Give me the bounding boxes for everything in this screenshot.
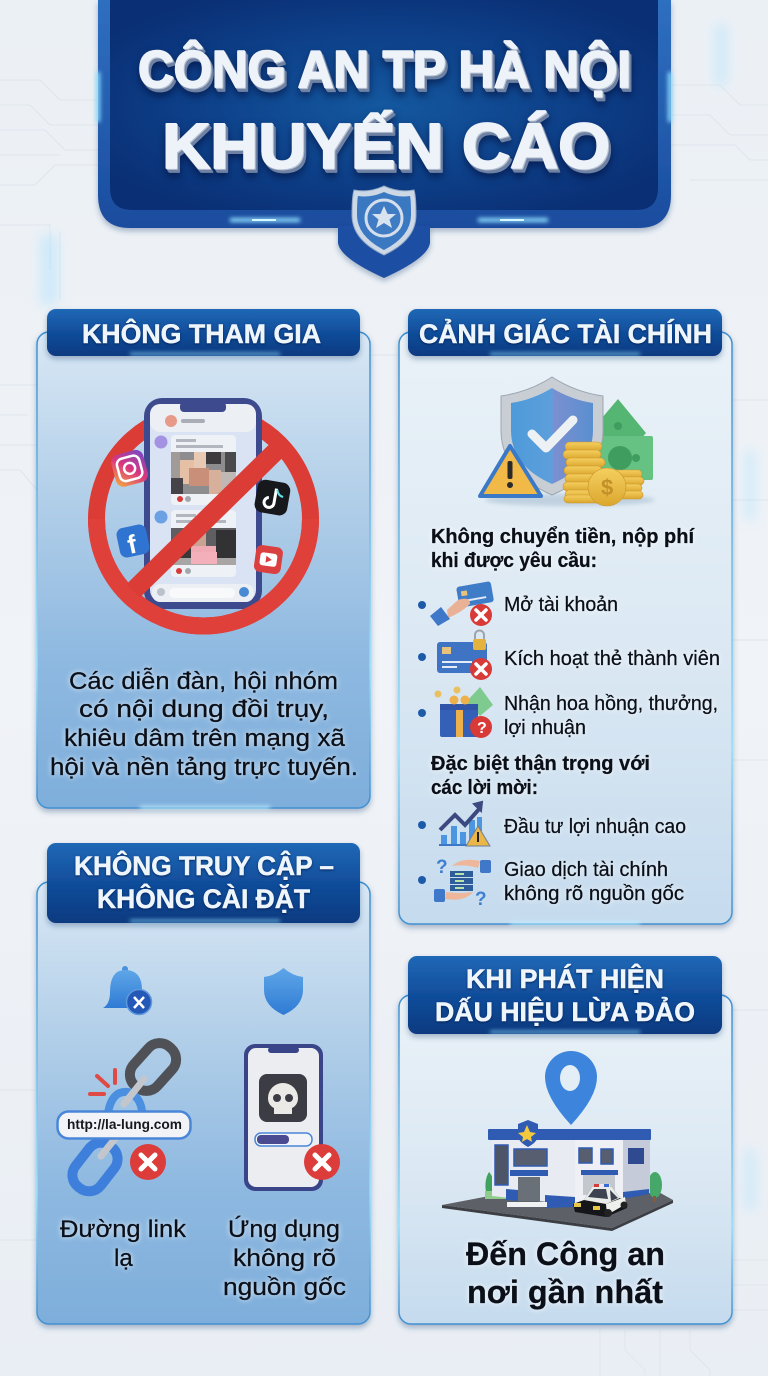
subheading 1: Không chuyển tiền, nộp phí [431, 526, 695, 548]
heading tab [408, 956, 722, 1034]
list item: giao dịch tài chính: ? [436, 857, 448, 878]
label: ứng dụng không rõ nguồn gốc: nguồn gốc [223, 1274, 346, 1301]
header banner [96, 0, 672, 278]
panel 1 text [50, 668, 358, 781]
panel: không tham gia [37, 309, 370, 809]
heading tab: CẢNH GIÁC TÀI CHÍNH [419, 317, 712, 349]
heading tab [47, 843, 360, 923]
list item: đầu tư lợi nhuận cao: Đầu tư lợi nhuận cao [504, 816, 686, 838]
url bar [58, 1112, 190, 1138]
title line 2: KHUYẾN CÁO [162, 110, 610, 182]
list item: kích hoạt thẻ thành viên [418, 630, 720, 680]
heading tab: KHÔNG CÀI ĐẶT [97, 883, 310, 914]
icon: broken link with url [58, 1037, 190, 1197]
blurred image 1 [171, 452, 236, 494]
text: đến công an nơi gần nhất: nơi gần nhất [467, 1274, 663, 1310]
list item: giao dịch tài chính [418, 857, 684, 910]
warning triangle [480, 446, 541, 496]
title line 1: CÔNG AN TP HÀ NỘI [138, 40, 631, 99]
icon: location pin [545, 1051, 597, 1125]
list item: nhận hoa hồng: ? [477, 720, 487, 737]
text: đến công an nơi gần nhất: Đến Công an [466, 1236, 665, 1272]
ring front and slash [96, 519, 310, 626]
panel 1 text: Các diễn đàn, hội nhóm [69, 668, 338, 695]
list item: giao dịch tài chính: Giao dịch tài chính [504, 859, 668, 881]
coins [563, 442, 644, 506]
list item: nhận hoa hồng [418, 686, 718, 739]
blurred image 2 [171, 528, 236, 565]
list item: giao dịch tài chính: ? [475, 889, 487, 910]
label: đường link lạ: lạ [114, 1245, 133, 1272]
icon: bell [103, 966, 152, 1014]
badge on roof [518, 1120, 538, 1147]
icon: facebook [115, 523, 151, 562]
heading tab: KHI PHÁT HIỆN [466, 963, 664, 994]
icon: prohibited phone with social apps [96, 398, 310, 626]
panel: khi phát hiện dấu hiệu lừa đảo [399, 956, 732, 1324]
icon: red x [130, 1144, 166, 1180]
cash [596, 399, 653, 480]
label: ứng dụng không rõ nguồn gốc: Ứng dụng [228, 1216, 340, 1243]
text: đến công an nơi gần nhất [466, 1236, 665, 1310]
icon: phone with skull app [244, 1044, 340, 1191]
list item: đầu tư lợi nhuận cao [418, 802, 686, 846]
icon: tiktok [253, 478, 292, 517]
icon: shield, warning, coins and cash [480, 377, 655, 506]
label: đường link lạ [60, 1216, 187, 1272]
label: ứng dụng không rõ nguồn gốc: không rõ [233, 1245, 336, 1272]
icon: instagram [109, 448, 150, 489]
panel 1 text: khiêu dâm trên mạng xã [64, 725, 346, 752]
icon: police badge [338, 186, 430, 278]
list item: mở tài khoản: Mở tài khoản [504, 594, 618, 616]
subheading 1 [431, 526, 695, 572]
list item: nhận hoa hồng: Nhận hoa hồng, thưởng, [504, 693, 718, 715]
subheading 2 [431, 753, 650, 799]
panel 1 text: có nội dung đồi trụy, [79, 696, 329, 723]
shield [501, 377, 603, 495]
icon: shield, warning, coins and cash: $ [601, 475, 613, 500]
label: đường link lạ: Đường link [60, 1216, 187, 1243]
list item: nhận hoa hồng: lợi nhuận [504, 717, 586, 739]
panel: cảnh giác tài chính [399, 309, 732, 925]
subheading 2: các lời mời: [431, 777, 538, 799]
panel: không truy cập không cài đặt [37, 843, 370, 1324]
heading tab [408, 309, 722, 356]
panel 1 text: hội và nền tảng trực tuyến. [50, 754, 358, 781]
heading tab: KHÔNG THAM GIA [82, 318, 321, 349]
label: ứng dụng không rõ nguồn gốc [223, 1216, 346, 1301]
heading tab: KHÔNG TRUY CẬP – [74, 850, 334, 881]
phone [144, 398, 262, 609]
list item: kích hoạt thẻ thành viên: Kích hoạt thẻ thành viên [504, 648, 720, 670]
url bar: http://la-lung.com [67, 1116, 182, 1132]
icon: facebook: f [125, 529, 140, 560]
icon: police station with car [442, 1120, 673, 1231]
icon: youtube [253, 544, 284, 575]
icon: shield [264, 968, 303, 1015]
subheading 1: khi được yêu cầu: [431, 550, 597, 572]
heading tab: DẤU HIỆU LỪA ĐẢO [435, 995, 695, 1027]
police car [573, 1184, 628, 1217]
list item: giao dịch tài chính: không rõ nguồn gốc [504, 883, 684, 905]
list item: mở tài khoản [418, 581, 618, 626]
icon: red x [304, 1144, 340, 1180]
subheading 2: Đặc biệt thận trọng với [431, 753, 650, 775]
heading tab [47, 309, 360, 356]
